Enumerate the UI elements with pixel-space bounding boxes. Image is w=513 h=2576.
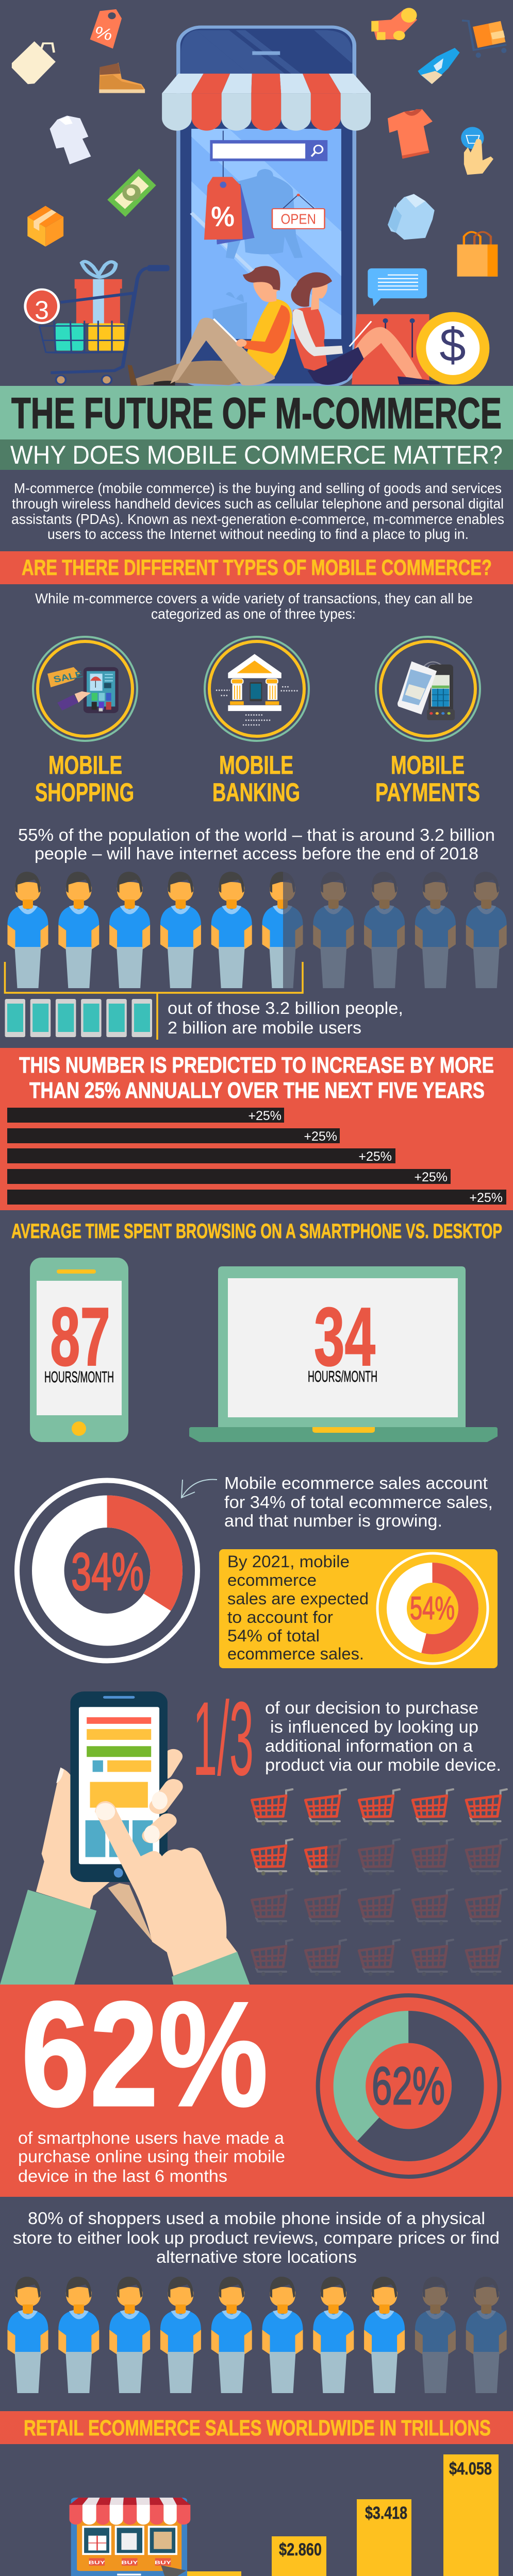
donut chart: 34 percent (17, 1481, 197, 1661)
hero illustration (12, 8, 506, 386)
label: mobile payments (375, 751, 480, 807)
mobile sales share text: for 34% of total ecommerce sales, (224, 1493, 493, 1512)
icon: online store monitor: BUY (121, 2560, 138, 2565)
forecast text: 54% of total (227, 1626, 320, 1645)
smartphone 87 hours: HOURS/MONTH (44, 1368, 114, 1386)
label: mobile payments: MOBILE (391, 751, 465, 779)
woman with tablet (291, 273, 440, 385)
icon: sneaker (418, 48, 460, 84)
laptop 34 hours: 34 (314, 1291, 375, 1383)
icon: bank with phone (216, 654, 297, 725)
icon: online store monitor: BUY (89, 2560, 106, 2565)
growth bars: +25% (469, 1191, 503, 1205)
text: 1/3 (193, 1680, 254, 1798)
mobile users text (168, 998, 403, 1037)
panel: mobile payments (376, 637, 480, 741)
intro paragraph: M-commerce (mobile commerce) is the buying and selling of goods and services (14, 480, 502, 496)
growth bars (7, 1108, 506, 1205)
intro paragraph: users to access the Internet without needing to find a place to plug in. (47, 526, 469, 542)
donut chart: 54 percent (377, 1553, 488, 1664)
panel: 2021 forecast (219, 1549, 498, 1668)
icon: phone and card terminal (398, 662, 455, 720)
bar chart: retail sales: $3.418 (365, 2503, 407, 2523)
icon: online store monitor: BUY (155, 2560, 172, 2565)
shoppers statement (13, 2209, 500, 2266)
icon: cart with box (462, 21, 506, 58)
forecast text (227, 1552, 369, 1663)
icon: white shirt (49, 115, 91, 164)
search bar (210, 131, 327, 184)
mobile users text: out of those 3.2 billion people, (168, 998, 403, 1018)
label: mobile payments: PAYMENTS (375, 778, 480, 807)
shoppers statement: store to either look up product reviews, compare prices or find (13, 2228, 500, 2247)
mobile sales share text: Mobile ecommerce sales account (224, 1473, 488, 1493)
icon: chat bubble (368, 268, 427, 306)
smartphone 87 hours (30, 1258, 128, 1442)
label: mobile banking (212, 751, 300, 807)
smartphone 87 hours: 87 (50, 1291, 110, 1383)
label: mobile shopping (35, 751, 134, 807)
bar chart: retail sales: $2.860 (279, 2540, 322, 2560)
mobile sales share text (224, 1473, 493, 1530)
icon: orange shopping bag (457, 232, 498, 277)
types intro text (35, 590, 473, 622)
icon: online store monitor (70, 2498, 190, 2576)
forecast text: ecommerce sales. (227, 1645, 364, 1663)
awning (162, 74, 371, 131)
forecast text: ecommerce (227, 1571, 317, 1589)
bar chart: retail sales: $4.058 (449, 2459, 492, 2479)
phones row (5, 999, 152, 1037)
open sign: OPEN (280, 211, 316, 227)
bar chart: retail sales (16, 2454, 499, 2576)
mobile users text: 2 billion are mobile users (168, 1018, 361, 1037)
cart badge number: 3 (35, 296, 49, 325)
growth bars: +25% (248, 1109, 282, 1123)
laptop 34 hours (189, 1266, 498, 1442)
donut chart: 62 percent: 62% (372, 2056, 445, 2115)
icon: red shopping bag (352, 314, 429, 384)
forecast text: By 2021, mobile (227, 1552, 350, 1571)
label: mobile banking: MOBILE (219, 751, 293, 779)
decision influence text: is influenced by looking up (270, 1717, 478, 1736)
mobile sales share text: and that number is growing. (224, 1511, 442, 1530)
donut chart: 54 percent: 54% (410, 1590, 455, 1626)
growth bars: +25% (358, 1149, 392, 1164)
smartphone purchase text: purchase online using their mobile (18, 2147, 285, 2166)
panel: 62 percent (0, 1971, 513, 2197)
types intro text: categorized as one of three types: (151, 606, 356, 622)
donut chart: 34 percent: 34% (71, 1542, 144, 1601)
people row: 55 percent with internet (7, 872, 507, 988)
label: mobile shopping: SHOPPING (35, 778, 134, 807)
open sign (272, 194, 325, 229)
coin dollar sign: $ (439, 319, 466, 371)
bracket (5, 962, 303, 1040)
icon: dollar coin (416, 312, 489, 384)
internet population statement: 55% of the population of the world – that is around 3.2 billion (18, 825, 495, 844)
intro paragraph (11, 480, 504, 542)
label: mobile shopping: MOBILE (48, 751, 122, 779)
icon: boot (99, 62, 145, 93)
big 62 percent figure: 62% (21, 1971, 268, 2138)
icon: discount tag (90, 9, 122, 48)
label: mobile banking: BANKING (212, 778, 300, 807)
icon: tablet with sale tag (47, 667, 119, 713)
people row: 80 percent of shoppers (7, 2277, 507, 2393)
decision influence text: additional information on a (265, 1736, 473, 1755)
hand holding smartphone (0, 1691, 250, 1985)
man with tablet (127, 266, 292, 386)
growth bars: +25% (304, 1129, 337, 1144)
internet population statement: people – will have internet access before the end of 2018 (35, 844, 478, 863)
sale tag: % (211, 201, 235, 232)
forecast text: to account for (227, 1608, 333, 1626)
smartphone purchase text (18, 2128, 285, 2185)
icon: banknote (107, 169, 156, 217)
panel: mobile banking (205, 637, 309, 741)
donut chart: 62 percent (318, 1995, 500, 2177)
sale tag (204, 177, 255, 244)
icon: denim shirt (388, 194, 435, 240)
icon: t-shirt (388, 109, 433, 159)
growth bars: +25% (414, 1170, 448, 1184)
internet population statement (18, 825, 495, 863)
icon: tablet with sale tag: SALE (52, 669, 84, 685)
shoppers statement: alternative store locations (156, 2247, 357, 2266)
arrow (181, 1480, 217, 1498)
icon: cream shopping bag (12, 41, 56, 84)
decision influence text: of our decision to purchase (265, 1698, 478, 1717)
decision influence text: product via our mobile device. (265, 1755, 501, 1774)
phone storefront (178, 27, 354, 385)
icon: socks (371, 8, 417, 40)
icon: discount tag: % (92, 23, 115, 44)
cart pictogram grid (252, 1789, 507, 1976)
shoppers statement: 80% of shoppers used a mobile phone inside of a physical (28, 2209, 485, 2228)
icon: parcel box (27, 206, 63, 247)
forecast text: sales are expected (227, 1589, 369, 1608)
laptop 34 hours: HOURS/MONTH (308, 1367, 377, 1385)
smartphone purchase text: device in the last 6 months (18, 2166, 227, 2185)
decision influence text (265, 1698, 501, 1774)
icon: hand tapping cart button (461, 127, 493, 175)
types intro text: While m-commerce covers a wide variety of transactions, they can all be (35, 590, 473, 606)
panel: 25 percent growth (0, 1048, 513, 1210)
growth heading (19, 1053, 494, 1103)
panel: mobile shopping (33, 637, 137, 741)
icon: shopping cart with gift (24, 262, 170, 384)
smartphone purchase text: of smartphone users have made a (18, 2128, 285, 2147)
